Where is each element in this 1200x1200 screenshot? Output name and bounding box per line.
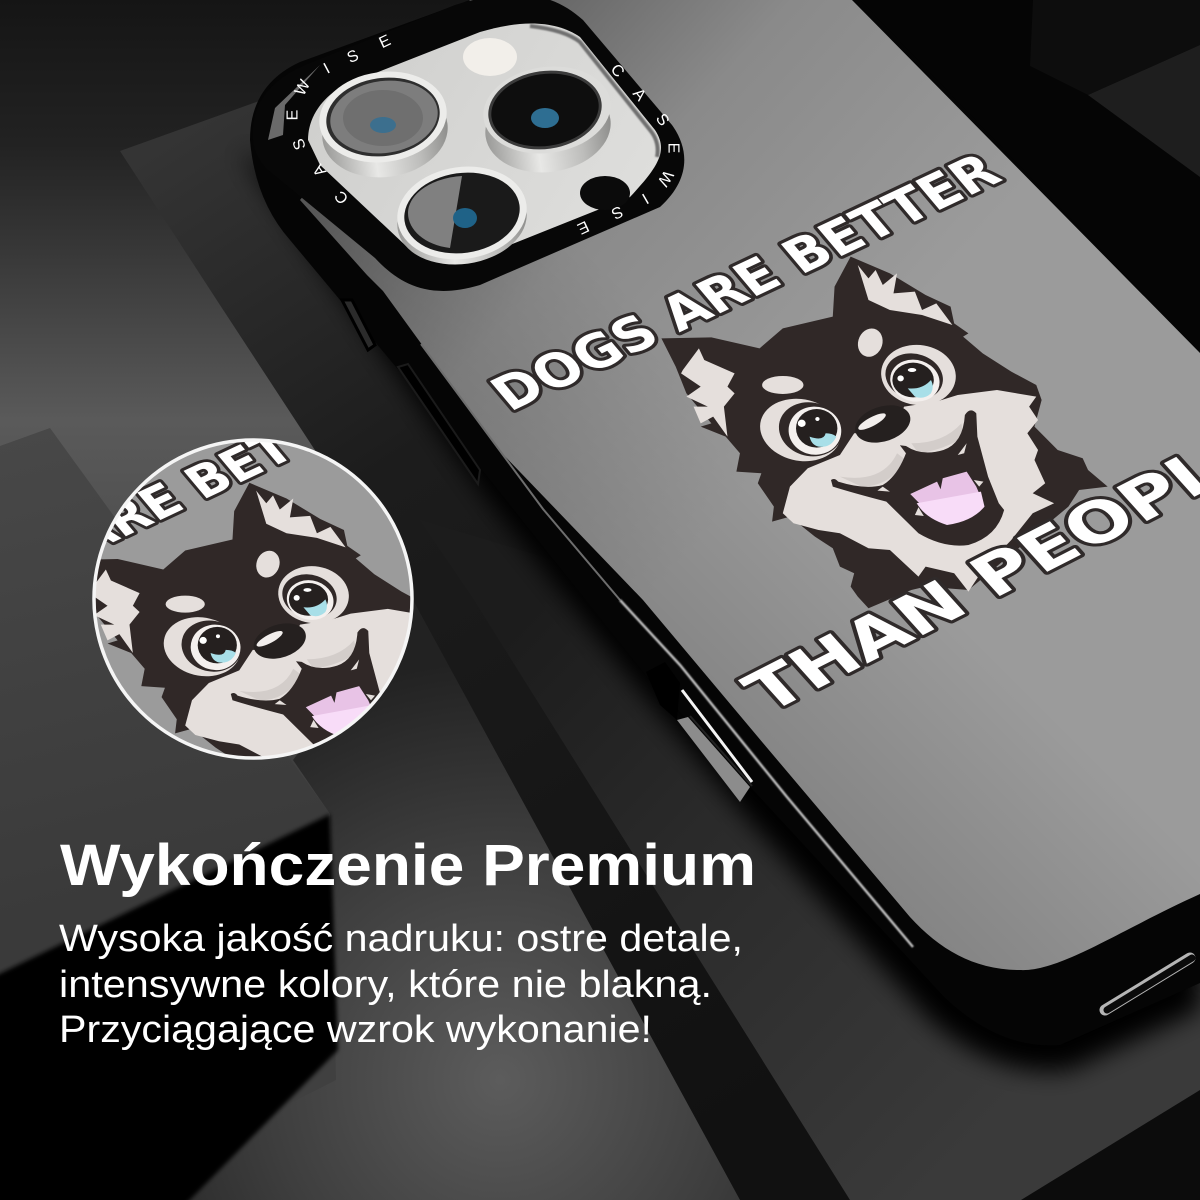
phone case black frame (250, 0, 1200, 1045)
circle fill (93, 439, 413, 759)
magnified print (96, 442, 410, 756)
casewise logo: C (607, 61, 627, 81)
back shading (300, 0, 1200, 970)
casewise logo: W (653, 167, 676, 190)
camera island (253, 0, 684, 291)
background: top right block surface (1088, 45, 1200, 177)
casewise logo (284, 32, 682, 237)
camera ring (253, 0, 684, 291)
silver side button (646, 662, 752, 802)
casewise logo: I (639, 190, 651, 206)
lens right (478, 59, 617, 180)
circle border (94, 440, 412, 758)
casewise logo: C (332, 187, 352, 207)
background: right dark wall (700, 0, 1200, 500)
casewise logo: S (609, 202, 625, 222)
phone (250, 0, 1200, 1045)
microphone hole (580, 176, 630, 210)
window inner edge (530, 26, 658, 157)
camera window (308, 24, 661, 261)
background: lit column between blocks (100, 600, 760, 1200)
phone shadow (240, 150, 1200, 1071)
body text (59, 918, 743, 1051)
casewise logo: E (575, 217, 591, 237)
casewise logo: I (321, 60, 333, 78)
body text: Wysoka jakość nadruku: ostre detale, (59, 918, 743, 960)
background: lower left block dark face (0, 814, 338, 1200)
charging port (1105, 958, 1192, 1010)
casewise logo: E (284, 110, 302, 120)
lens bottom (391, 158, 533, 273)
casewise logo: S (652, 111, 672, 129)
casewise logo: A (310, 160, 330, 179)
casewise logo: E (377, 32, 393, 52)
print text: THAN PEOPLE: THAN PEOPLE (730, 414, 1200, 725)
background: bottom right black wedge (1021, 1090, 1200, 1200)
zoom circle callout (92, 438, 414, 760)
body text: intensywne kolory, które nie blakną. (59, 964, 712, 1006)
background: faint top right block (1030, 0, 1200, 95)
clear wedge on ring (268, 65, 320, 140)
volume slot (398, 364, 480, 484)
background: large block behind the phone (120, 90, 1000, 1200)
phone grey back (300, 0, 1200, 970)
casewise logo: W (292, 77, 314, 99)
rim highlight upper (421, 344, 620, 600)
casewise logo: S (345, 47, 361, 67)
casewise logo: E (664, 143, 682, 153)
body text: Przyciągające wzrok wykonanie! (59, 1009, 652, 1051)
lens left (313, 64, 454, 185)
side port slot (342, 300, 375, 350)
casewise logo: A (629, 85, 649, 105)
print text: DOGS ARE BETTER: DOGS ARE BETTER (479, 143, 1012, 421)
casewise logo: S (290, 136, 310, 152)
background: lower left block top surface (0, 428, 330, 973)
rim highlight lower (620, 600, 913, 947)
background: floor right of the block (420, 520, 1200, 1200)
print artwork: dog (661, 257, 1108, 608)
heading: Wykończenie Premium (60, 833, 756, 898)
flash (463, 38, 517, 76)
